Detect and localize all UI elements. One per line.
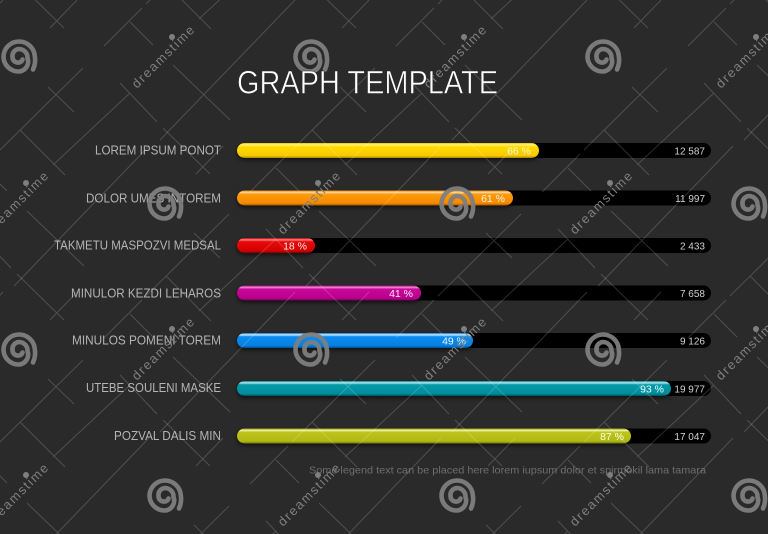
bar row: pozval dalis min <box>114 428 711 446</box>
bar row: lorem ipsum ponot: 12 587 <box>674 146 705 158</box>
bar row: dolor umes intorem: 11 997 <box>675 194 705 205</box>
watermark: dreamstime labels: dreamstime <box>275 169 343 237</box>
bar row: minulos pomeni torem: 49 % <box>442 336 466 348</box>
bar row: dolor umes intorem: 61 % <box>481 193 505 205</box>
bar row: minulor kezdi leharos <box>71 286 711 302</box>
bar row: utebe souleni maske: 93 % <box>640 384 664 396</box>
bar row: minulor kezdi leharos: 7 658 <box>680 289 705 300</box>
bar row: pozval dalis min: 87 % <box>600 431 624 443</box>
bar row: pozval dalis min: POZVAL DALIS MIN <box>114 429 221 443</box>
bar row: utebe souleni maske <box>86 381 711 398</box>
bar row: takmetu maspozvi medsal <box>54 238 711 255</box>
bar row: pozval dalis min: 17 047 <box>674 432 705 443</box>
bar row: lorem ipsum ponot <box>95 143 711 160</box>
bar row: takmetu maspozvi medsal: TAKMETU MASPOZVI MEDSAL <box>54 238 221 252</box>
bar row: lorem ipsum ponot: LOREM IPSUM PONOT <box>95 144 221 158</box>
bar row: minulor kezdi leharos: MINULOR KEZDI LEHAROS <box>71 286 221 300</box>
watermark: dreamstime labels: dreamstime <box>275 461 343 529</box>
bar row: minulos pomeni torem: MINULOS POMENI TOREM <box>72 334 221 348</box>
bar row: lorem ipsum ponot: 66 % <box>507 146 531 158</box>
bar row: minulos pomeni torem: 9 126 <box>680 336 705 348</box>
watermark: dreamstime labels: dreamstime <box>567 461 635 529</box>
watermark: dreamstime labels: dreamstime <box>129 315 197 383</box>
title: GRAPH TEMPLATE <box>237 64 498 100</box>
watermark: dreamstime labels: dreamstime <box>421 315 489 383</box>
bar row: dolor umes intorem: DOLOR UMES INTOREM <box>86 192 221 206</box>
bar row: minulos pomeni torem <box>72 333 711 350</box>
bar row: utebe souleni maske: UTEBE SOULENI MASKE <box>86 381 221 395</box>
bar row: utebe souleni maske: 19 977 <box>674 384 705 396</box>
bar row: minulor kezdi leharos: 41 % <box>389 288 413 300</box>
watermark: dreamstime labels: dreamstime <box>567 169 635 237</box>
bar row: dolor umes intorem <box>86 190 711 208</box>
legend text: Some legend text can be placed here lorem iupsum dolor et spirmokil lama tamara <box>309 464 706 476</box>
watermark: dreamstime labels: dreamstime <box>129 23 197 91</box>
watermark: dreamstime labels: dreamstime <box>421 23 489 91</box>
bar row: takmetu maspozvi medsal: 2 433 <box>680 242 705 252</box>
bar row: takmetu maspozvi medsal: 18 % <box>283 240 307 252</box>
